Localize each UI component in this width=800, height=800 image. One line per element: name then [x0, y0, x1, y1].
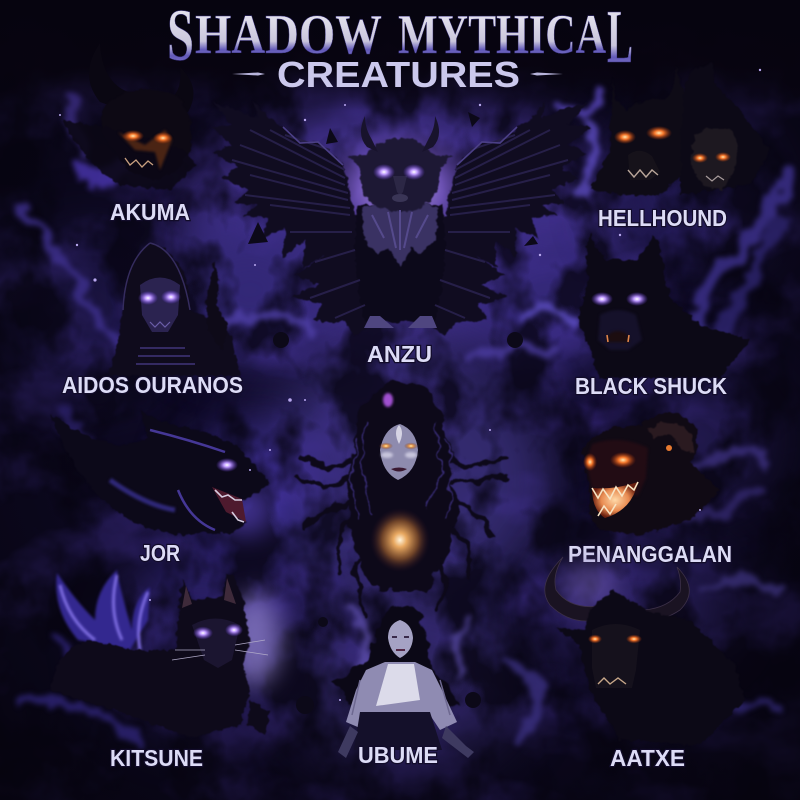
icon: Aatxe bull [545, 557, 745, 745]
icon: glowing chest core [370, 508, 430, 572]
icon: Kitsune tails [56, 570, 150, 650]
icon: Penanggalan demon head [582, 412, 720, 535]
label: Jor: JOR [140, 540, 180, 566]
label: Kitsune: KITSUNE [110, 745, 203, 771]
title line 1 [167, 0, 633, 79]
purple energy wisps [20, 90, 790, 740]
icon: Kitsune fox [50, 572, 270, 738]
halo behind Anzu [305, 115, 495, 265]
panel: Penanggalan [568, 412, 732, 567]
label: Hellhound: HELLHOUND [598, 205, 727, 231]
icon: Anzu creature [210, 100, 590, 336]
icon: Hellhound heads [590, 62, 770, 195]
panel: Akuma [62, 43, 196, 225]
panel: Anzu [210, 100, 590, 367]
glow behind Kitsune [229, 594, 281, 686]
title ornaments [232, 72, 563, 76]
icon: flowing hair [296, 382, 508, 615]
floating shards and orbs [248, 112, 538, 714]
panel: Black Shuck [575, 233, 750, 399]
title [167, 0, 633, 95]
label: Penanggalan: PENANGGALAN [568, 541, 732, 567]
panel: Ubume [335, 606, 474, 768]
icon: Ubume woman [335, 606, 474, 758]
panel: central woman [296, 382, 508, 615]
label: Anzu: ANZU [367, 341, 432, 367]
title line 2: CREATURES [277, 54, 520, 95]
label: Black Shuck: BLACK SHUCK [575, 373, 727, 399]
glow between horns [562, 561, 618, 609]
panel: Kitsune [50, 570, 281, 771]
panel: Aidos Ouranos [62, 243, 243, 398]
icon: Jor dragon [50, 410, 273, 536]
label: Aidos Ouranos: AIDOS OURANOS [62, 372, 243, 398]
icon: hooded figure [108, 243, 240, 376]
panel: Hellhound [590, 62, 770, 231]
panel: Jor [50, 410, 273, 566]
panel: Aatxe [545, 557, 745, 771]
stars [59, 69, 761, 701]
title line 1: MYTHICA [398, 4, 606, 66]
label: Akuma: AKUMA [110, 199, 190, 225]
icon: Black Shuck dog [578, 233, 750, 378]
title line 1: HADOW [195, 4, 382, 66]
label: Ubume: UBUME [358, 742, 438, 768]
icon: pale face [379, 393, 418, 480]
icon: Akuma demon [62, 43, 196, 190]
label: Aatxe: AATXE [610, 745, 685, 771]
